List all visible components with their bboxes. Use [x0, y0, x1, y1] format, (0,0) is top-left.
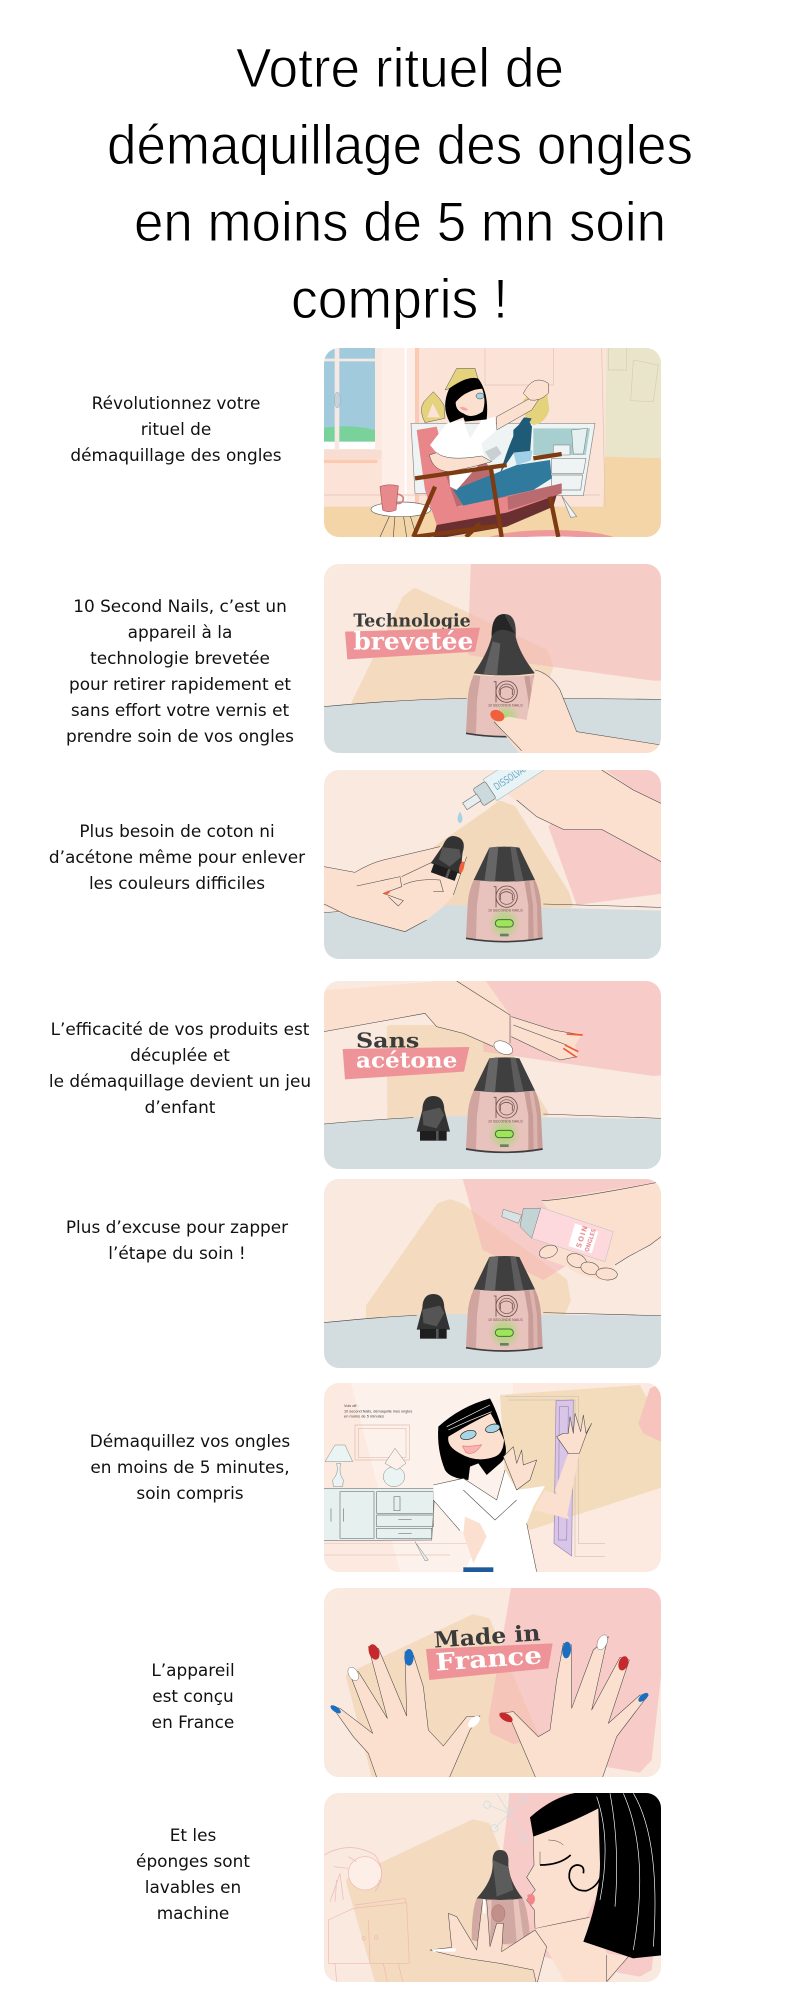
voice-over note	[344, 1404, 412, 1418]
banner: Sans acétone: acétone	[356, 1048, 457, 1073]
panel 7: made in France hands	[321, 1585, 664, 1780]
text block 4: L’efficacité de vos produits est	[51, 1019, 310, 1039]
banner: Made in France: Made in	[433, 1620, 541, 1654]
text block 3	[49, 821, 305, 893]
panel 1: woman relaxing in armchair	[324, 348, 661, 537]
text block 8: lavables en	[145, 1877, 241, 1897]
text block 4: le démaquillage devient un jeu	[49, 1071, 311, 1091]
title: compris !	[291, 267, 508, 330]
door	[505, 1397, 605, 1557]
room furniture	[321, 1425, 467, 1561]
side table and cup	[371, 485, 431, 537]
device with green light	[466, 1256, 543, 1351]
drop	[457, 812, 462, 823]
title	[107, 36, 693, 330]
text block 5: Plus d’excuse pour zapper	[66, 1217, 288, 1237]
text block 1: rituel de	[141, 419, 211, 439]
dissolvant bottle: DISSOLVANT	[492, 760, 535, 793]
banner: Sans acétone: Sans	[356, 1028, 419, 1052]
text block 2	[66, 596, 294, 746]
device: 10 SECONDS NAILS	[488, 704, 523, 708]
text block 2: pour retirer rapidement et	[69, 674, 291, 694]
sponge pod	[417, 1294, 450, 1339]
banner: Technologie brevetée: brevetée	[353, 626, 473, 655]
armchair wood frame	[413, 454, 562, 537]
text block 6	[90, 1431, 290, 1503]
title: en moins de 5 mn soin	[134, 190, 666, 253]
text block 7: L’appareil	[151, 1660, 235, 1680]
background line drawing: mirror and cabinet	[324, 1847, 409, 1982]
device	[466, 614, 543, 737]
text block 3: d’acétone même pour enlever	[49, 847, 305, 867]
text block 4	[49, 1019, 311, 1117]
banner: Technologie brevetée: Technologie	[353, 612, 471, 632]
window	[321, 345, 382, 463]
text block 7: est conçu	[152, 1686, 234, 1706]
text block 8: Et les	[170, 1825, 216, 1845]
hand	[430, 1899, 547, 1985]
right arm	[507, 767, 664, 863]
text block 3: les couleurs difficiles	[89, 873, 265, 893]
voice-over note: 10 second Nails, démaquille mes ongles	[344, 1409, 412, 1413]
text block 4: d’enfant	[145, 1097, 216, 1117]
panel 3: dissolvant poured on sponge	[324, 770, 661, 959]
text block 6: soin compris	[136, 1483, 244, 1503]
device with green light	[466, 847, 543, 942]
text block 1: démaquillage des ongles	[70, 445, 282, 465]
soin ongles bottle: ONGLES	[584, 1228, 598, 1253]
text block 6: Démaquillez vos ongles	[90, 1431, 290, 1451]
text block 8: machine	[157, 1903, 229, 1923]
device held in hand	[472, 1850, 530, 1944]
device with green light: 10 SECONDS NAILS	[488, 1318, 523, 1322]
soin ongles bottle: SOIN	[575, 1225, 590, 1249]
text block 4: décuplée et	[130, 1045, 230, 1065]
left hand	[329, 1643, 482, 1780]
text block 5: l’étape du soin !	[108, 1243, 246, 1263]
banner: Made in France: France	[434, 1640, 543, 1677]
text block 7: en France	[152, 1712, 234, 1732]
title: démaquillage des ongles	[107, 113, 693, 176]
rug	[490, 530, 613, 537]
text block 8: éponges sont	[136, 1851, 250, 1871]
right hand	[498, 1633, 650, 1780]
text block 2: prendre soin de vos ongles	[66, 726, 294, 746]
dissolvant bottle	[462, 770, 544, 810]
fingers	[538, 1243, 618, 1281]
woman	[429, 378, 552, 506]
text block 2: appareil à la	[128, 622, 232, 642]
woman	[433, 1398, 592, 1575]
device with green light	[466, 1057, 543, 1152]
text block 2: 10 Second Nails, c’est un	[73, 596, 287, 616]
banner: Made in France	[426, 1620, 553, 1680]
text block 6: en moins de 5 minutes,	[90, 1457, 290, 1477]
sideboard	[411, 423, 595, 517]
panel 4: without acetone, finger on device	[321, 978, 667, 1173]
hand pressing device	[321, 978, 583, 1060]
armchair	[417, 427, 562, 537]
sponge pod	[417, 1096, 450, 1141]
hand with orange nail	[488, 670, 664, 756]
text block 5	[66, 1217, 288, 1263]
text block 1	[70, 393, 282, 465]
text block 2: sans effort votre vernis et	[71, 700, 289, 720]
banner: Technologie brevetée	[345, 612, 480, 659]
panel 2: patented technology, device and hand	[321, 560, 667, 756]
woman's face and hair	[527, 1789, 664, 1985]
soin ongles bottle	[502, 1207, 613, 1262]
device with green light: 10 SECONDS NAILS	[488, 1119, 523, 1123]
device with green light: 10 SECONDS NAILS	[488, 909, 523, 913]
panel 6: happy woman showing nails	[321, 1380, 664, 1576]
text block 8	[136, 1825, 250, 1923]
vases and lamp	[421, 368, 549, 425]
text block 1: Révolutionnez votre	[92, 393, 260, 413]
text block 3: Plus besoin de coton ni	[79, 821, 275, 841]
left hand holding pod	[321, 831, 472, 932]
title: Votre rituel de	[236, 36, 564, 99]
hand holding bottle	[540, 1181, 664, 1280]
panel 8: woman kissing device	[321, 1789, 664, 1985]
voice-over note: Voix off :	[344, 1404, 359, 1408]
panel 5: nail care bottle	[321, 1175, 667, 1371]
molecule decoration	[484, 1793, 528, 1842]
banner: Sans acétone	[343, 1028, 469, 1079]
text block 2: technologie brevetée	[90, 648, 270, 668]
voice-over note: en moins de 5 minutes	[344, 1414, 384, 1418]
text block 7	[151, 1660, 235, 1732]
